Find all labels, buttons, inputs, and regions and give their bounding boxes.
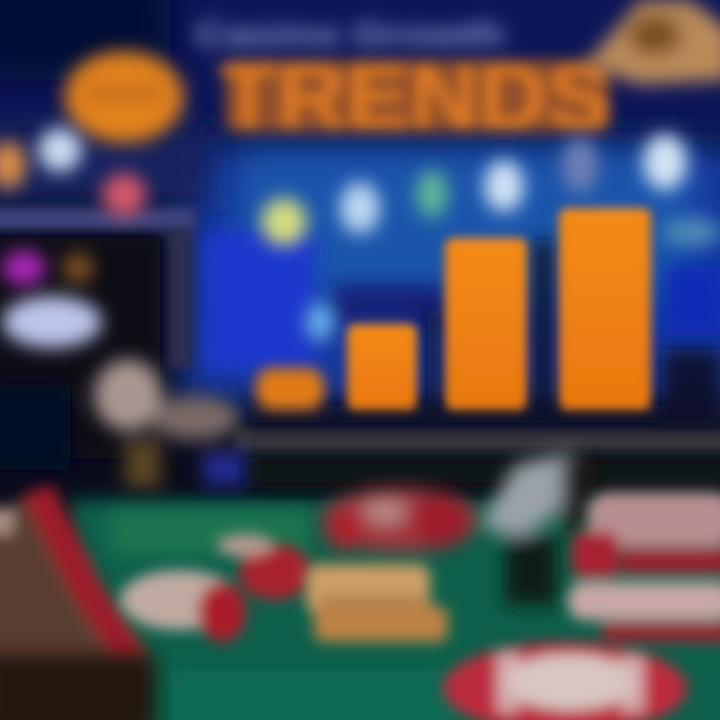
icons: glowing light points above the bars <box>261 134 720 342</box>
poker chips: centre left <box>120 534 311 642</box>
poker chips: left stack <box>0 484 150 720</box>
poker chips: right stack <box>568 492 720 642</box>
bar 1 <box>256 368 324 410</box>
hand and phone figure <box>480 450 588 605</box>
dark band above table <box>250 458 720 488</box>
chart: ascending orange bars <box>235 208 720 454</box>
icon: orange coin badge <box>64 51 184 143</box>
bar 3 <box>445 238 527 410</box>
white lamp <box>38 128 82 172</box>
bar shelf <box>235 428 720 454</box>
orange lamp <box>0 141 26 189</box>
bar 4 <box>559 208 651 410</box>
poker chips: bottom right <box>443 642 687 720</box>
pink lamp <box>102 173 146 217</box>
shelf post <box>166 228 192 368</box>
bottom left shadow <box>0 655 155 720</box>
white screen glow <box>2 296 102 348</box>
left shelf scene <box>0 128 195 458</box>
cards stack <box>306 564 448 642</box>
shelf band <box>0 208 195 232</box>
amber light <box>62 252 94 284</box>
bar gaps <box>250 240 720 425</box>
sub-heading: Casino Growth <box>195 16 505 54</box>
title backing glow <box>225 60 610 132</box>
dark interior <box>0 238 160 458</box>
purple light <box>2 250 46 286</box>
icon: top right golden emblem <box>585 0 720 85</box>
poker chips: centre stack <box>322 488 478 552</box>
title: TRENDS <box>219 46 611 148</box>
seated figures <box>0 359 249 488</box>
panel: green felt table <box>70 500 720 720</box>
bar 2 <box>347 324 417 410</box>
